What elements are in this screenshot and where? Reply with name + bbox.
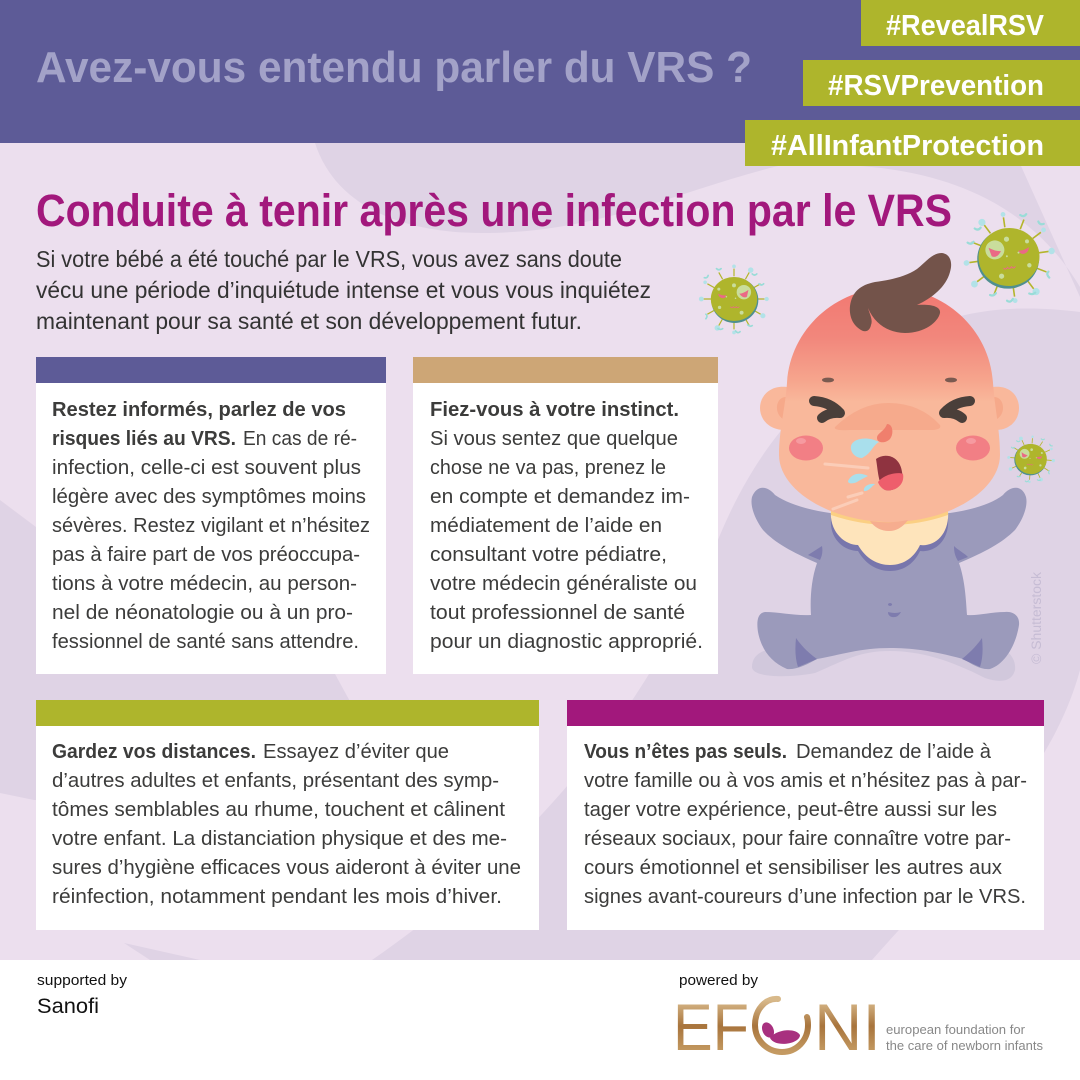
panel: trust your instinct <box>413 357 718 674</box>
panel: you are not alone: cours émotionnel et sensibiliser les autres aux <box>584 856 1003 879</box>
intro text: maintenant pour sa santé et son développement futur. <box>36 308 582 334</box>
header band <box>0 0 1080 143</box>
panel: stay informed: infection, celle-ci est souvent plus <box>52 456 361 479</box>
page background <box>0 143 1080 960</box>
panel: you are not alone: tager votre expérience, peut-être aussi sur les <box>584 798 997 821</box>
photo credit: © Shutterstock <box>1029 572 1044 664</box>
title: Avez-vous entendu parler du VRS ? <box>36 43 752 92</box>
bib shadow <box>831 518 948 571</box>
bib <box>831 510 948 565</box>
panel: trust your instinct: en compte et demandez im- <box>430 485 690 508</box>
hashtag tags: #RSVPrevention <box>828 70 1044 102</box>
body folds <box>795 546 983 667</box>
panel: keep your distance: votre enfant. La distanciation physique et des me- <box>52 827 507 850</box>
icon: small virus <box>1006 434 1057 485</box>
panel: stay informed: pas à faire part de vos préoccupa- <box>52 543 360 566</box>
panel: trust your instinct: tout professionnel de santé <box>430 601 685 624</box>
icon: medium virus <box>699 264 769 334</box>
footer: supported by <box>37 972 128 1018</box>
panel: stay informed: tions à votre médecin, au person- <box>52 572 357 595</box>
panel: keep your distance <box>36 700 539 930</box>
closed eyes <box>814 401 970 418</box>
body <box>751 488 1027 669</box>
intro text: Si votre bébé a été touché par le VRS, vous avez sans doute <box>36 246 622 272</box>
footer: powered by EFCNI logo: powered by <box>679 972 758 989</box>
panel: stay informed: nel de néonatologie ou à un pro- <box>52 601 353 624</box>
panel: keep your distance: d’autres adultes et enfants, présentant des symp- <box>52 769 499 792</box>
panel: stay informed: En cas de ré- <box>243 427 357 450</box>
panel: stay informed: sévères. Restez vigilant et n’hésitez <box>52 514 370 537</box>
hashtag tags: #AllInfantProtection <box>771 130 1044 162</box>
panel: keep your distance: Gardez vos distances. <box>52 740 256 763</box>
nose drip <box>877 424 892 442</box>
panel: trust your instinct: Si vous sentez que quelque <box>430 427 678 450</box>
intro text <box>36 246 651 334</box>
hashtag tags <box>745 0 1080 166</box>
falling drops <box>848 474 875 491</box>
intro text: vécu une période d’inquiétude intense et vous vous inquiétez <box>36 277 651 303</box>
cheek streaks <box>825 464 868 509</box>
panel: keep your distance: tômes semblables au rhume, touchent et câlinent <box>52 798 505 821</box>
icon: large virus <box>957 206 1061 309</box>
mouth <box>876 456 903 490</box>
panel: keep your distance: réinfection, notamment pendant les mois d’hiver. <box>52 885 502 908</box>
panel: keep your distance: Essayez d’éviter que <box>263 740 449 763</box>
footer: powered by EFCNI logo: european foundation for <box>886 1022 1026 1037</box>
footer: supported by: supported by <box>37 972 128 989</box>
nose bridge <box>835 403 940 430</box>
footer: powered by EFCNI logo: EF <box>673 990 749 1064</box>
ears <box>760 387 787 430</box>
panel: trust your instinct: Fiez-vous à votre instinct. <box>430 398 679 421</box>
panel: trust your instinct: médiatement de l’aide en <box>430 514 662 537</box>
tear <box>851 439 879 458</box>
logo C with baby <box>755 999 808 1052</box>
footer: powered by EFCNI logo: the care of newborn infants <box>886 1038 1043 1053</box>
panel: you are not alone: Vous n’êtes pas seuls. <box>584 740 787 763</box>
panel: stay informed <box>36 357 386 674</box>
panel: stay informed: Restez informés, parlez de vos <box>52 398 346 421</box>
panel: trust your instinct: consultant votre pédiatre, <box>430 543 667 566</box>
chin <box>870 520 908 531</box>
panel: stay informed: risques liés au VRS. <box>52 427 236 450</box>
hair <box>850 253 951 333</box>
hashtag tags: #RevealRSV <box>886 10 1045 42</box>
eyebrows <box>822 378 834 382</box>
panel: you are not alone: votre famille ou à vos amis et n’hésitez pas à par- <box>584 769 1027 792</box>
panel: trust your instinct: votre médecin généraliste ou <box>430 572 697 595</box>
footer: powered by EFCNI logo <box>673 972 1043 1064</box>
panel: you are not alone: réseaux sociaux, pour faire connaître votre par- <box>584 827 1011 850</box>
panel: trust your instinct: pour un diagnostic approprié. <box>430 630 703 653</box>
panel: you are not alone: signes avant-coureurs d’une infection par le VRS. <box>584 885 1026 908</box>
panel: stay informed: fessionnel de santé sans attendre. <box>52 630 359 653</box>
panel: stay informed: légère avec des symptômes moins <box>52 485 366 508</box>
cheeks <box>789 436 823 460</box>
footer: powered by EFCNI logo: NI <box>814 990 881 1064</box>
ground shadow <box>752 648 1015 681</box>
panel: you are not alone <box>567 700 1044 930</box>
head <box>779 288 1000 522</box>
footer: supported by: Sanofi <box>37 995 99 1018</box>
panel: you are not alone: Demandez de l’aide à <box>796 740 992 763</box>
illustration: crying baby <box>751 253 1027 681</box>
panel: keep your distance: sures d’hygiène efficaces vous aideront à éviter une <box>52 856 521 879</box>
main heading: Conduite à tenir après une infection par le VRS <box>36 185 952 236</box>
panel: trust your instinct: chose ne va pas, prenez le <box>430 456 666 479</box>
belly button <box>888 603 901 617</box>
